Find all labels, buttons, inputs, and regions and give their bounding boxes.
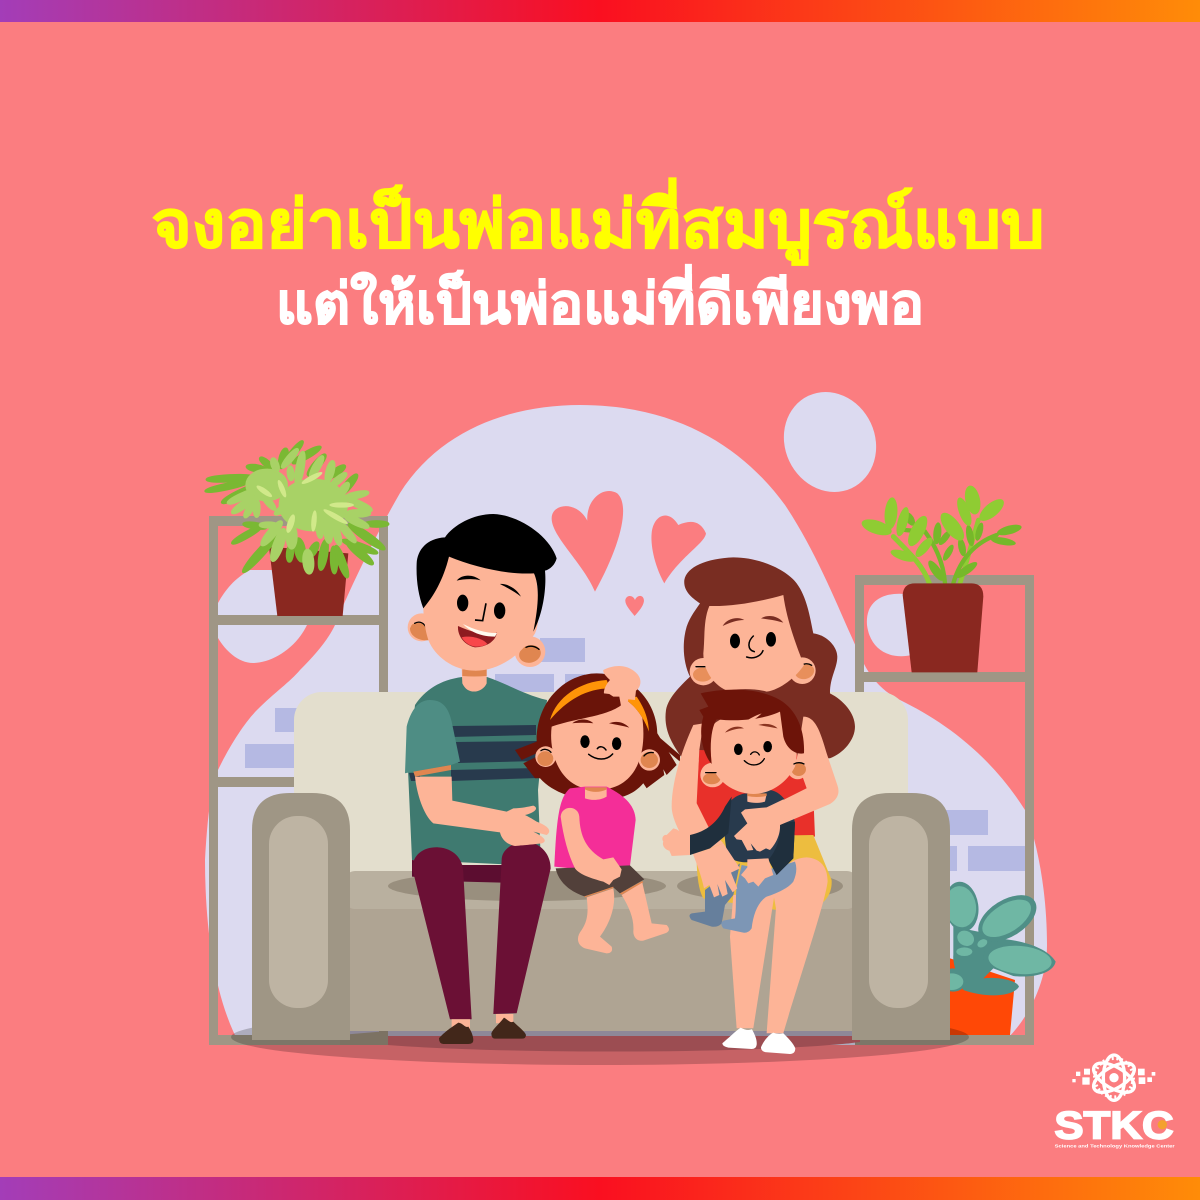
boy left hand: [662, 828, 690, 856]
lavender background blob: [205, 377, 1047, 1045]
seat shadows: [388, 871, 666, 901]
hearts: [552, 491, 706, 616]
boy back leg: [689, 863, 740, 927]
mother face: [703, 595, 804, 692]
mother left arm: [672, 723, 723, 855]
top gradient bar: [0, 0, 1200, 22]
title: [152, 177, 1044, 335]
boy right hand: [741, 858, 773, 887]
boy: [662, 690, 838, 933]
bricks: [245, 638, 1025, 871]
girl neck: [585, 787, 607, 800]
boy hair: [699, 690, 804, 764]
logo atom icon: [1089, 1055, 1139, 1100]
left sofa arm: [252, 793, 350, 1040]
title: จงอย่าเป็นพ่อแม่ที่สมบูรณ์แบบ: [152, 177, 1044, 266]
girl arm and hand: [561, 808, 622, 885]
plant: right potted sprout: [860, 484, 1023, 672]
sofa: [252, 692, 950, 1052]
logo tagline: Science and Technology Knowledge Center: [1055, 1144, 1175, 1150]
logo wordmark: STKC: [1054, 1105, 1174, 1148]
girl facial features: [580, 735, 590, 748]
sofa seat cushion: [345, 871, 857, 909]
girl face: [551, 700, 643, 790]
man's hand on girl's head: [603, 666, 640, 709]
mother legs: [730, 892, 775, 1028]
bottom gradient bar: [0, 1177, 1200, 1200]
mother facial features: [730, 634, 740, 648]
girl shorts: [556, 865, 644, 896]
right sofa arm: [852, 793, 950, 1040]
pot: [903, 583, 983, 672]
mother right arm: [777, 717, 838, 825]
mother lower hand: [693, 843, 740, 897]
base edge: [340, 1031, 870, 1036]
girl legs: [578, 888, 614, 953]
mother hand on boy: [734, 799, 793, 852]
man facial features: [457, 595, 468, 611]
girl: [515, 666, 680, 953]
sofa base: [340, 900, 870, 1032]
ground shadow: [231, 1009, 969, 1065]
man shirt: [408, 677, 547, 866]
mother: [665, 557, 855, 1054]
plant: bottom right succulent: [940, 880, 1056, 1035]
left shelf: [209, 516, 388, 1045]
girl ears: [535, 746, 556, 767]
boy torso: [724, 790, 795, 875]
mother shoes: [722, 1028, 795, 1054]
mother torso: [696, 750, 815, 837]
boy sleeve: [690, 797, 732, 855]
sofa back: [294, 692, 908, 912]
title: แต่ให้เป็นพ่อแม่ที่ดีเพียงพอ: [276, 264, 924, 335]
man: [405, 514, 557, 1044]
mother ears: [690, 658, 717, 685]
man arm and hand: [415, 777, 549, 846]
pot: [269, 547, 348, 616]
man hair: [417, 514, 557, 632]
boy front leg: [721, 862, 796, 933]
man sleeve: [405, 700, 460, 777]
logo: [1054, 1055, 1175, 1150]
man ankles and shoes: [452, 1014, 513, 1030]
right shelf: [855, 575, 1034, 1045]
boy facial features: [734, 744, 743, 755]
logo pixel squares: [1072, 1069, 1155, 1085]
boy face: [709, 710, 797, 794]
man face: [423, 555, 539, 671]
mother hair: [665, 557, 855, 760]
boy ears: [700, 763, 725, 787]
man neck: [462, 668, 487, 692]
man trousers: [412, 860, 502, 883]
girl hairband: [550, 680, 649, 732]
girl fringe: [550, 688, 650, 733]
mother skirt: [697, 835, 832, 910]
girl back hair: [515, 673, 677, 800]
man ears: [408, 613, 436, 641]
boy neck: [747, 794, 767, 803]
girl dress: [554, 787, 636, 870]
plant: left potted fern: [205, 440, 388, 616]
